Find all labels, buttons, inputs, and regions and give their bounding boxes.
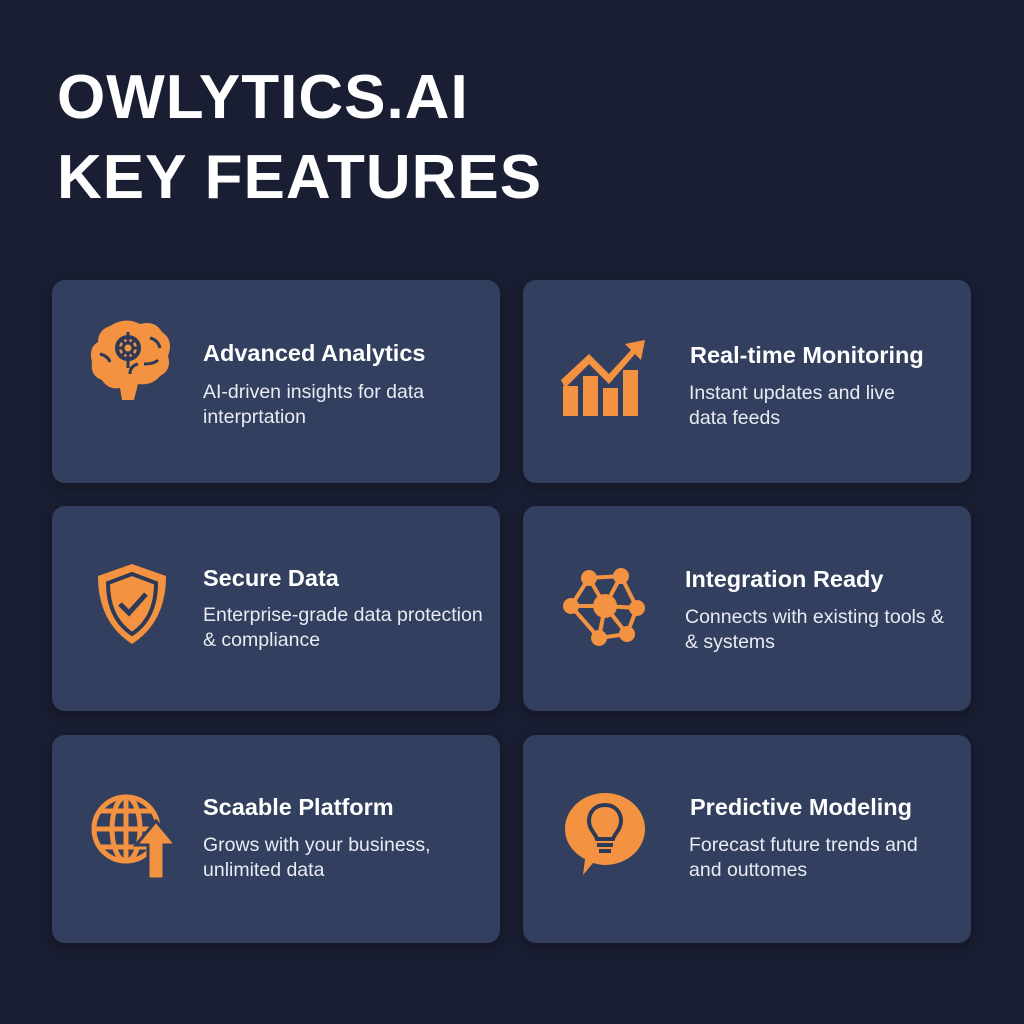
- description: [203, 834, 431, 881]
- heading: Integration Ready: [685, 566, 883, 592]
- description: Grows with your business,: [203, 834, 431, 856]
- description: interprtation: [203, 406, 306, 428]
- description: & systems: [685, 631, 775, 653]
- panel: scalable platform: [52, 735, 500, 943]
- title: OWLYTICS.AI: [57, 63, 469, 132]
- heading: Real-time Monitoring: [690, 342, 924, 368]
- heading: Scaable Platform: [203, 794, 394, 820]
- heading: Predictive Modeling: [690, 794, 912, 820]
- description: Instant updates and live: [689, 382, 895, 404]
- icon: chart arrow: [561, 340, 645, 416]
- icon: shield: [98, 564, 166, 644]
- panel: advanced analytics: [52, 280, 500, 483]
- description: & compliance: [203, 629, 320, 651]
- icon: brain with gear: [90, 320, 170, 400]
- description: Connects with existing tools &: [685, 606, 944, 628]
- title: KEY FEATURES: [57, 143, 542, 212]
- icon: globe with arrow: [92, 794, 173, 878]
- panel: integration ready: [523, 506, 971, 711]
- icon: network nodes: [563, 568, 645, 646]
- title: [57, 63, 542, 212]
- description: [203, 604, 483, 651]
- description: AI-driven insights for data: [203, 381, 424, 403]
- description: [689, 834, 918, 881]
- description: Forecast future trends and: [689, 834, 918, 856]
- description: unlimited data: [203, 859, 324, 881]
- heading: Secure Data: [203, 565, 339, 591]
- panel: real-time monitoring: [523, 280, 971, 483]
- description: [685, 606, 944, 653]
- description: data feeds: [689, 407, 780, 429]
- description: [689, 382, 895, 429]
- panel: secure data: [52, 506, 500, 711]
- heading: Advanced Analytics: [203, 340, 425, 366]
- description: and outtomes: [689, 859, 807, 881]
- icon: lightbulb bubble: [565, 793, 645, 875]
- description: Enterprise-grade data protection: [203, 604, 483, 626]
- panel: predictive modeling: [523, 735, 971, 943]
- description: [203, 381, 424, 428]
